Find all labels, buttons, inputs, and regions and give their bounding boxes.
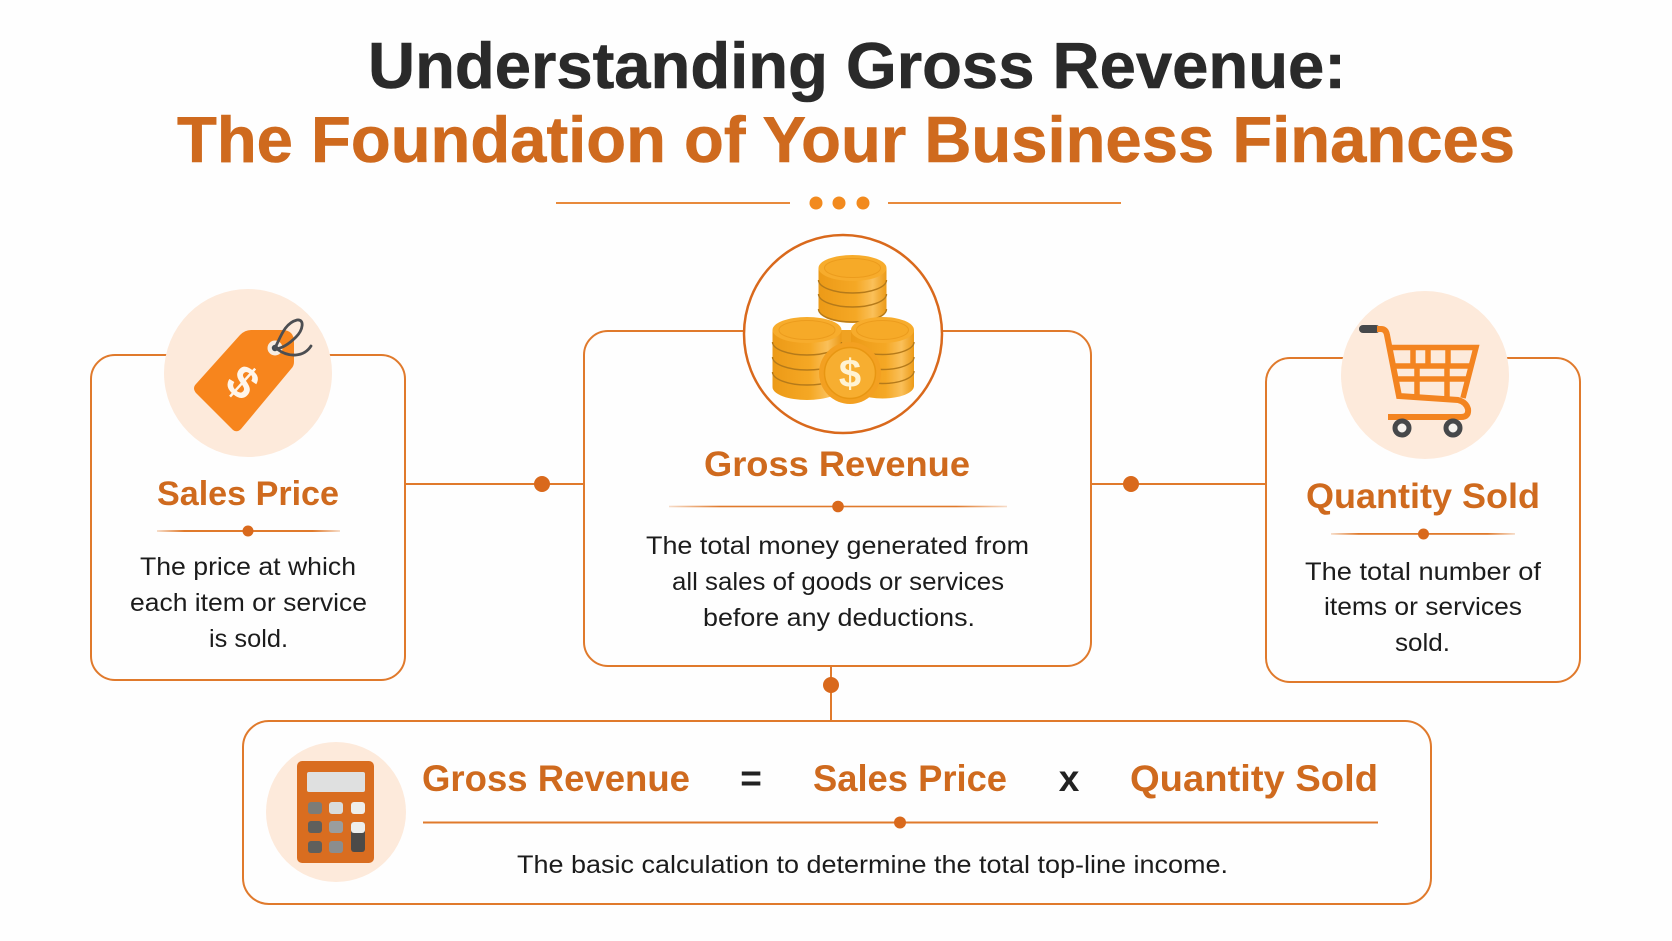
formula term: sales price: Sales Price	[813, 758, 1007, 799]
title ornament divider	[556, 196, 1121, 210]
icon: price tag	[164, 289, 332, 457]
right stack	[851, 317, 914, 398]
icon: calculator	[266, 742, 406, 882]
connector: sales price to gross revenue	[405, 476, 583, 492]
icon: shopping cart	[1341, 291, 1509, 459]
description	[646, 532, 1029, 632]
description: items or services	[1324, 593, 1522, 621]
formula term: gross revenue: Gross Revenue	[422, 758, 690, 799]
panel: quantity sold	[1266, 291, 1580, 682]
description: each item or service	[130, 589, 367, 617]
divider	[423, 816, 1378, 828]
left stack	[772, 317, 842, 400]
icon: coin stacks	[744, 235, 942, 433]
connector: gross revenue to formula	[823, 666, 839, 721]
caption: The basic calculation to determine the total top-line income.	[517, 851, 1228, 879]
divider	[669, 501, 1007, 512]
description	[130, 553, 367, 653]
heading: gross revenue: Gross Revenue	[704, 445, 970, 484]
title line 2: The Foundation of Your Business Finances	[177, 103, 1515, 176]
description: The price at which	[140, 553, 356, 581]
description: The total number of	[1305, 558, 1541, 586]
panel: formula	[243, 721, 1431, 904]
description: The total money generated from	[646, 532, 1029, 560]
panel: sales price	[91, 289, 405, 680]
heading: sales price: Sales Price	[157, 475, 339, 513]
front dollar coin	[819, 342, 881, 404]
description: all sales of goods or services	[672, 568, 1004, 596]
description	[1305, 558, 1541, 657]
description: before any deductions.	[703, 604, 975, 632]
description: is sold.	[209, 625, 288, 653]
title line 1: Understanding Gross Revenue:	[368, 29, 1346, 102]
multiply sign: x	[1059, 758, 1080, 799]
equals sign: =	[740, 758, 762, 799]
heading: quantity sold: Quantity Sold	[1306, 477, 1540, 516]
connector: gross revenue to quantity sold	[1091, 476, 1266, 492]
title	[177, 29, 1515, 176]
icon: price tag: $	[216, 354, 270, 410]
description: sold.	[1395, 629, 1450, 657]
front dollar coin: $	[839, 352, 861, 396]
divider	[1331, 528, 1515, 540]
top stack	[818, 255, 886, 323]
panel: gross revenue	[584, 235, 1091, 666]
formula term: quantity sold: Quantity Sold	[1130, 758, 1378, 799]
divider	[157, 526, 340, 536]
